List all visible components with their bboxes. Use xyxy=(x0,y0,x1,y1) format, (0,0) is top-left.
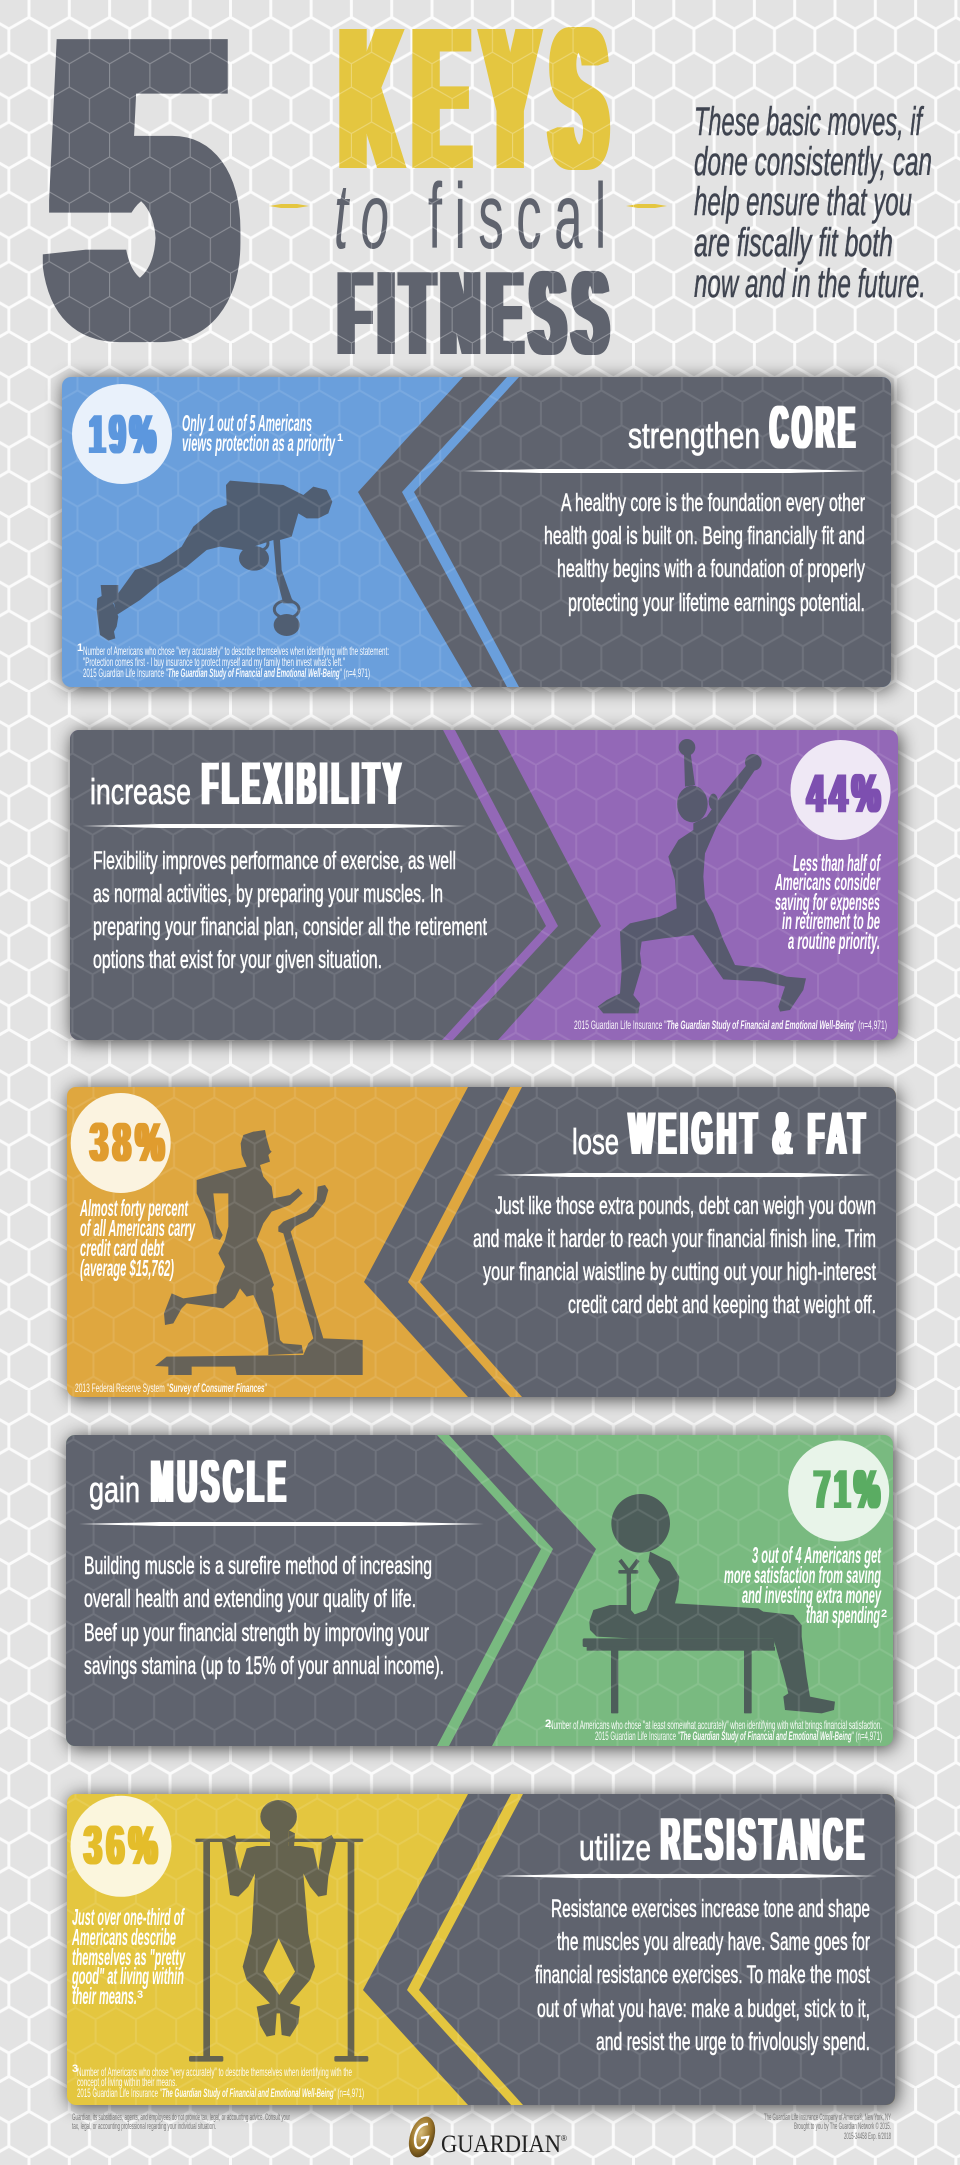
footnote: concept of living within their means. xyxy=(77,2075,177,2089)
heading: lose xyxy=(572,1121,619,1162)
heading xyxy=(572,1100,869,1167)
logo: Guardian xyxy=(404,2113,567,2161)
stat text xyxy=(72,1904,186,2009)
footnote xyxy=(77,642,389,680)
footnote: 2 xyxy=(545,1718,551,1730)
body text: options that exist for your given situation. xyxy=(93,946,382,974)
registered mark: ® xyxy=(561,2134,567,2143)
stat text: (average $15,762) xyxy=(80,1255,174,1281)
stat text xyxy=(80,1195,196,1281)
body text xyxy=(544,489,865,617)
heading: increase xyxy=(90,771,191,812)
text: 2015-34458 Exp. 6/2018 xyxy=(844,2131,891,2142)
right dash xyxy=(626,204,667,208)
stat text xyxy=(182,410,343,456)
stat text: Almost forty percent xyxy=(80,1195,189,1221)
body text: savings stamina (up to 15% of your annual income). xyxy=(84,1652,444,1680)
footnote: 2013 Federal Reserve System "Survey of Consumer Finances" xyxy=(75,1381,267,1395)
stat text: 1 xyxy=(337,432,343,444)
panel: utilize resistance xyxy=(67,1794,897,2107)
figure: bench press xyxy=(583,1494,835,1713)
footnote: 2015 Guardian Life Insurance "The Guardian Study of Financial and Emotional Well-Being" (n=4,971) xyxy=(77,2086,364,2100)
heading rule xyxy=(463,469,867,473)
stat text: than spending xyxy=(806,1602,880,1628)
footnote: 3 xyxy=(72,2063,78,2075)
body text: Beef up your financial strength by improving your xyxy=(84,1619,429,1647)
heading rule xyxy=(79,1522,484,1526)
title: to fiscal: to fiscal xyxy=(334,164,606,268)
body text xyxy=(84,1552,444,1680)
text: Guardian, its subsidiaries, agents, and employees do not provide tax, legal, or accounting advice. Consult your xyxy=(72,2112,290,2123)
panel: increase flexibility xyxy=(70,730,900,1042)
stat text: views protection as a priority xyxy=(182,430,336,456)
stat text: 2 xyxy=(881,1608,887,1620)
stat circle: 36% xyxy=(70,1796,172,1897)
panel: gain muscle xyxy=(66,1435,895,1748)
stat circle: 19%: 19% xyxy=(89,403,160,465)
figure: lunge with dumbbells xyxy=(598,739,806,1013)
footnote: Number of Americans who chose "very accurately" to describe themselves when identifying with the xyxy=(77,2065,352,2079)
stat text: credit card debt xyxy=(80,1235,165,1261)
body text xyxy=(93,847,487,974)
stat circle: 36%: 36% xyxy=(84,1814,162,1876)
icon: gold G emblem xyxy=(404,2113,440,2161)
stat circle: 44%: 44% xyxy=(807,762,885,824)
panel: lose weight and fat: of all Americans carry xyxy=(80,1215,196,1241)
figure: plank row with kettlebells xyxy=(97,481,332,641)
figure: pull-ups on bar xyxy=(189,1800,368,2062)
intro text xyxy=(694,100,932,306)
stat text: 3 xyxy=(137,1989,143,2001)
heading rule xyxy=(82,824,467,828)
body text: overall health and extending your quality of life. xyxy=(84,1585,416,1613)
body text: Building muscle is a surefire method of increasing xyxy=(84,1552,432,1580)
footnote xyxy=(72,2063,364,2100)
header xyxy=(0,0,960,421)
footnote: 2015 Guardian Life Insurance "The Guardian Study of Financial and Emotional Well-Being" (n=4,971) xyxy=(83,666,370,680)
heading: strengthen xyxy=(628,415,760,456)
panel: lose weight and fat xyxy=(67,1087,898,1399)
stat text: Only 1 out of 5 Americans xyxy=(182,410,312,436)
footer legal xyxy=(764,2112,891,2142)
stat circle: 44% xyxy=(790,740,890,840)
panel: increase flexibility: FLEXIBILITY xyxy=(202,750,405,817)
heading xyxy=(89,1448,290,1515)
heading rule xyxy=(495,1874,877,1878)
body text: as normal activities, by preparing your muscles. In xyxy=(93,880,443,908)
heading xyxy=(90,750,405,817)
stat circle: 71% xyxy=(788,1440,889,1542)
stat text xyxy=(775,850,881,954)
panel: utilize resistance: Just over one-third of xyxy=(72,1904,185,1930)
panel: utilize resistance: themselves as "pretty xyxy=(72,1944,186,1970)
panel: gain muscle: MUSCLE xyxy=(151,1448,290,1515)
footer disclaimer xyxy=(72,2112,290,2132)
footnote: "Protection comes first - I buy insurance to protect myself and my family then invest what's left." xyxy=(83,655,345,669)
panel: utilize resistance: good" at living within xyxy=(72,1963,184,1989)
stat circle: 38%: 38% xyxy=(90,1111,169,1173)
stat text xyxy=(724,1542,887,1628)
heading: utilize xyxy=(579,1827,651,1868)
heading xyxy=(579,1806,868,1873)
body text xyxy=(535,1895,870,2056)
stat text: Americans describe xyxy=(72,1924,176,1950)
figure: runner on treadmill xyxy=(155,1130,363,1375)
stat text: their means. xyxy=(72,1983,137,2009)
stat circle: 38% xyxy=(71,1093,171,1193)
left dash xyxy=(269,204,309,208)
panel: strengthen core xyxy=(62,377,893,689)
body text xyxy=(473,1192,876,1319)
heading: gain xyxy=(89,1469,140,1510)
footnote xyxy=(545,1718,882,1743)
footnote: Number of Americans who chose "very accurately" to describe themselves when identifying with the statement: xyxy=(83,644,389,658)
heading rule xyxy=(493,1173,875,1177)
footnote: 1 xyxy=(77,642,83,654)
footer disclaimer: tax, legal, or accounting professional regarding your individual situation. xyxy=(72,2121,216,2132)
heading xyxy=(628,394,859,461)
stat circle: 71%: 71% xyxy=(814,1458,884,1520)
wordmark: GUARDIAN xyxy=(441,2131,561,2158)
hex line overlay on title xyxy=(0,0,960,365)
body text: Flexibility improves performance of exercise, as well xyxy=(93,847,456,875)
body text: preparing your financial plan, consider all the retirement xyxy=(93,913,487,941)
stat circle: 19% xyxy=(72,384,172,484)
